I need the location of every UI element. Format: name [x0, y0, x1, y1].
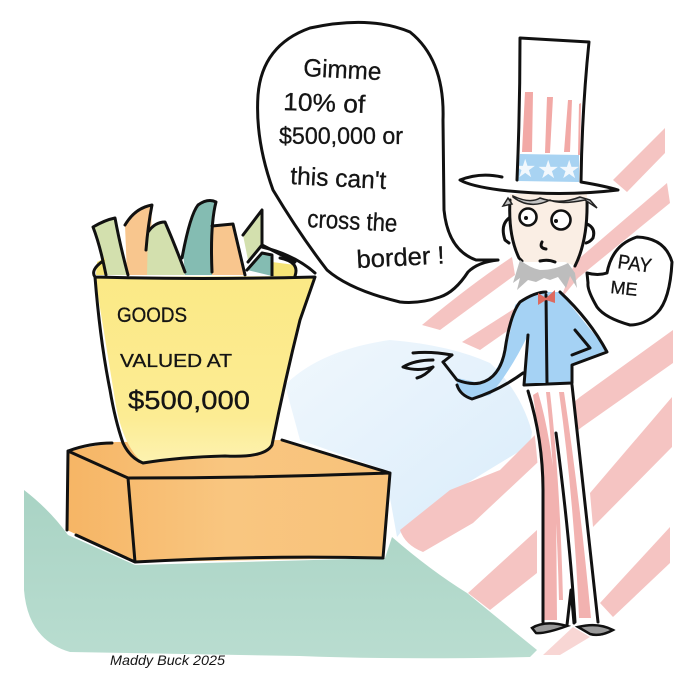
goods in the bucket — [93, 201, 297, 276]
Uncle Sam figure — [403, 38, 618, 635]
bucket body — [95, 276, 315, 463]
speech text: Gimme — [303, 54, 382, 86]
eyes — [520, 208, 570, 230]
small speech bubble: pay me: PAY — [616, 251, 653, 278]
speech text: this can't — [290, 162, 387, 195]
speech text: border ! — [356, 241, 445, 274]
bucket label: $500,000 — [128, 385, 250, 415]
blue watercolor wash — [285, 340, 532, 537]
orange box — [67, 440, 390, 562]
signature: Maddy Buck 2025 — [110, 652, 225, 668]
hat: ★ — [558, 156, 580, 184]
hand — [403, 352, 452, 378]
speech text: $500,000 or — [279, 123, 403, 150]
large speech bubble — [258, 22, 498, 302]
hat band with stars — [517, 154, 579, 182]
small speech bubble: pay me — [587, 237, 672, 325]
ears — [503, 218, 594, 243]
face — [510, 194, 587, 266]
bucket label: GOODS — [117, 304, 187, 327]
trousers — [528, 385, 598, 622]
nose and mouth — [540, 242, 555, 262]
hair — [503, 196, 597, 208]
speech text: 10% of — [283, 88, 366, 119]
bucket label: VALUED AT — [120, 351, 232, 371]
hat — [460, 38, 618, 194]
speech text — [279, 54, 445, 274]
shoes — [532, 590, 613, 635]
hat: ★ — [537, 156, 559, 184]
green ground — [24, 490, 537, 658]
bucket of goods — [93, 201, 315, 463]
hat: ★ — [514, 155, 536, 183]
flag stripes — [400, 128, 673, 655]
small speech bubble: pay me: ME — [610, 277, 639, 300]
bow tie — [538, 290, 555, 305]
bucket label — [117, 304, 250, 415]
speech text: cross the — [307, 205, 398, 238]
hat stripes — [522, 92, 581, 155]
moustache and beard — [513, 260, 577, 290]
shirt — [443, 292, 607, 399]
